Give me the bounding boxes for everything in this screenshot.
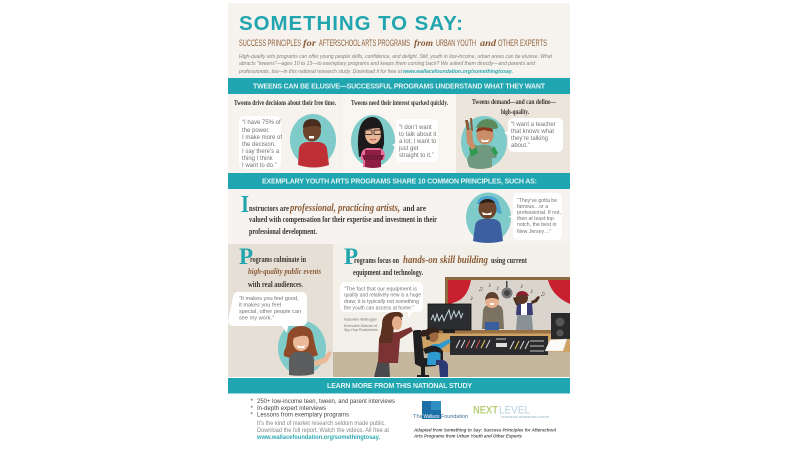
principle text (249, 203, 437, 236)
icon: girl with long hair (278, 321, 332, 376)
quote attribution: Kassandra VanBruggen (344, 318, 377, 322)
icon: boy with green cap and drumsticks (461, 116, 507, 169)
banner: principles: EXEMPLARY YOUTH ARTS PROGRAMS SHARE 10 COMMON PRINCIPLES, SUCH AS: (262, 178, 537, 186)
banner: learn more (228, 378, 570, 394)
panel: tween 1 (228, 94, 343, 173)
intro text: High-quality arts programs can offer young people skills, confidence, and delight. Still, youth in low-income, urban areas can be elusive. What (239, 54, 552, 60)
speech bubble: I make more of (242, 135, 282, 141)
speech bubble: just get (398, 146, 419, 152)
intro text: www.wallacefoundation.org/somethingtosay. (403, 69, 513, 75)
intro text (238, 54, 552, 75)
source credit: Arts Programs from Urban Youth and Other Experts (413, 434, 522, 440)
speech bubble (392, 119, 438, 162)
heading (472, 98, 557, 116)
drop cap: I (241, 192, 249, 218)
speech bubble: “It makes you feel good, (239, 296, 299, 302)
subtitle: SUCCESS PRINCIPLES (239, 38, 301, 49)
principle text: rograms culminate in (250, 254, 306, 264)
quote bubble: draw; it is typically not something (344, 299, 419, 305)
study highlights list: In-depth expert interviews (257, 405, 326, 412)
subtitle: AFTERSCHOOL ARTS PROGRAMS (319, 38, 410, 49)
heading: Tweens demand—and can define— (472, 98, 557, 106)
study highlights list: 250+ low-income teen, tween, and parent interviews (257, 398, 395, 405)
drop cap: P (239, 244, 253, 269)
principle text: professional development. (249, 226, 317, 236)
study highlights list: * (250, 405, 254, 412)
principle text: valued with compensation for their expertise and investment in their (249, 214, 437, 224)
quote attribution: Executive Director of (344, 324, 378, 328)
speech bubble: I want to do.” (242, 163, 277, 169)
child at console in chair (413, 327, 451, 377)
speech bubble: professional. If not, (517, 210, 561, 216)
desk (422, 330, 570, 352)
banner: tweens: TWEENS CAN BE ELUSIVE—SUCCESSFUL PROGRAMS UNDERSTAND WHAT THEY WANT (253, 84, 546, 90)
call to action text: www.wallacefoundation.org/somethingtosay. (256, 435, 380, 441)
speech bubble: to talk about it (399, 132, 437, 138)
principle text: rograms focus on (354, 255, 399, 265)
speech bubble: “I have 75% of (242, 120, 281, 126)
subtitle: URBAN YOUTH (436, 38, 476, 49)
intro text: attracts “tweens”—ages 10 to 13—to exemplary programs and keeps them coming back? We asked them directly—and parents and (239, 61, 536, 67)
panel: tween 3 (456, 94, 570, 173)
music notes: ♪ (496, 285, 500, 292)
speech bubble: the power. (242, 128, 270, 134)
study highlights list: * (250, 398, 254, 405)
speech bubble: New Jersey…” (517, 229, 551, 235)
speech bubble: that knows what (511, 129, 554, 135)
logo: Next Level: STRATEGIC MARKETING GROUP (501, 415, 549, 419)
heading: high-quality. (501, 108, 529, 116)
icon: boy in red sweater (290, 114, 336, 168)
banner: principles (228, 173, 570, 189)
principle text: nstructors are (249, 203, 289, 213)
logo: Next Level: NEXT (473, 404, 498, 416)
intro text: professionals, too—in this national research study. Download it for free at (238, 69, 402, 75)
music notes: ♫ (478, 286, 483, 293)
principle text: high-quality public events (248, 266, 322, 276)
title: SOMETHING TO SAY: (239, 12, 463, 35)
study highlights list (250, 398, 395, 418)
speech bubble: “I don’t want (399, 125, 432, 131)
drop cap: P (344, 244, 358, 269)
speech bubble: famous…or a (517, 204, 548, 210)
speech bubble (508, 193, 562, 240)
subtitle: OTHER EXPERTS (498, 38, 547, 49)
principle text (353, 255, 527, 277)
icon: boy in blue cap (466, 192, 511, 243)
quote bubble: the youth can access at home.” (344, 306, 414, 312)
music notes: ♪ (520, 283, 524, 290)
logo: The Wallace Foundation: Foundation (441, 414, 468, 420)
source credit: Adapted from Something to Say: Success Principles for Afterschool (413, 428, 557, 434)
mixing console (450, 336, 548, 355)
music notes: ♪ (530, 288, 534, 295)
principle text: and are (403, 203, 426, 213)
subtitle: and (480, 39, 496, 49)
panel: instructors (228, 189, 570, 244)
speech bubble: about.” (511, 143, 530, 149)
singer 1 (482, 292, 504, 330)
speech bubble: a lot; I want to (399, 139, 437, 145)
music notes: ♫ (540, 291, 545, 298)
speech bubble: special, other people can (239, 309, 301, 315)
source credit (413, 428, 557, 440)
music notes (470, 282, 545, 302)
study highlights list: Lessons from exemplary programs (257, 412, 349, 418)
speech bubble: thing I think (242, 156, 274, 162)
woman standing (374, 312, 413, 377)
speaker (551, 313, 570, 339)
speech bubble (504, 118, 563, 152)
logo: Next Level: LEVEL (499, 404, 530, 416)
call to action text: Download the full report. Watch the videos. All free at (257, 428, 389, 434)
speech bubble (239, 116, 285, 169)
logo: The Wallace Foundation: Wallace (424, 414, 440, 420)
panel: public events (228, 244, 333, 377)
speech bubble: the decision. (242, 142, 276, 148)
study highlights list: * (250, 412, 254, 418)
speech bubble: then at least top (517, 216, 554, 222)
principle text: hands-on skill building (403, 255, 488, 266)
panel: tween 2 (343, 94, 456, 173)
logo: Next Level (473, 404, 549, 419)
speech bubble: “They’ve gotta be (517, 198, 557, 204)
sheet of paper (545, 339, 567, 351)
singer 2 (513, 291, 540, 330)
logo: The Wallace Foundation: The (413, 414, 423, 420)
speech bubble: I say there’s a (242, 149, 280, 155)
speech bubble: it makes you feel (239, 302, 281, 308)
principle text: with real audiences. (248, 279, 303, 289)
quote bubble: quality and relatively new is a huge (344, 292, 421, 298)
speech bubble: “I want a teacher (511, 122, 556, 128)
call to action text (256, 421, 389, 441)
banner: tweens (228, 78, 570, 94)
principle text: professional, practicing artists, (289, 203, 400, 214)
music notes: ♪ (470, 295, 474, 302)
speech bubble: they’re talking (511, 136, 548, 142)
logo: The Wallace Foundation (413, 401, 468, 420)
monitor with waveform (428, 304, 471, 333)
speech bubble: notch, the best in (517, 222, 557, 228)
banner: learn more: LEARN MORE FROM THIS NATIONAL STUDY (327, 383, 472, 390)
subtitle: for (303, 39, 316, 49)
red curtains (448, 280, 570, 305)
subtitle (239, 38, 547, 49)
studio window (445, 277, 570, 331)
speech bubble: see my work.” (239, 316, 274, 322)
panel: skill building (333, 244, 570, 377)
music notes: ♪ (488, 282, 492, 289)
quote bubble (340, 282, 423, 318)
quote attribution (344, 318, 378, 332)
principle text: equipment and technology. (353, 267, 423, 277)
header panel (228, 3, 570, 78)
speech bubble (228, 292, 307, 333)
quote attribution: Spy Hop Productions (344, 328, 378, 332)
icon: girl with glasses (351, 115, 395, 168)
microphone (502, 281, 512, 298)
subtitle: from (414, 39, 433, 49)
heading: Tweens drive decisions about their free time. (234, 99, 336, 107)
speech bubble: straight to it.” (399, 153, 434, 159)
floor (333, 352, 570, 377)
principle text (248, 254, 322, 289)
call to action text: It’s the kind of market research seldom made public. (257, 421, 386, 427)
quote bubble: “The fact that our equipment is (344, 286, 417, 292)
principle text: using current (491, 255, 527, 265)
heading: Tweens need their interest sparked quickly. (351, 99, 448, 107)
